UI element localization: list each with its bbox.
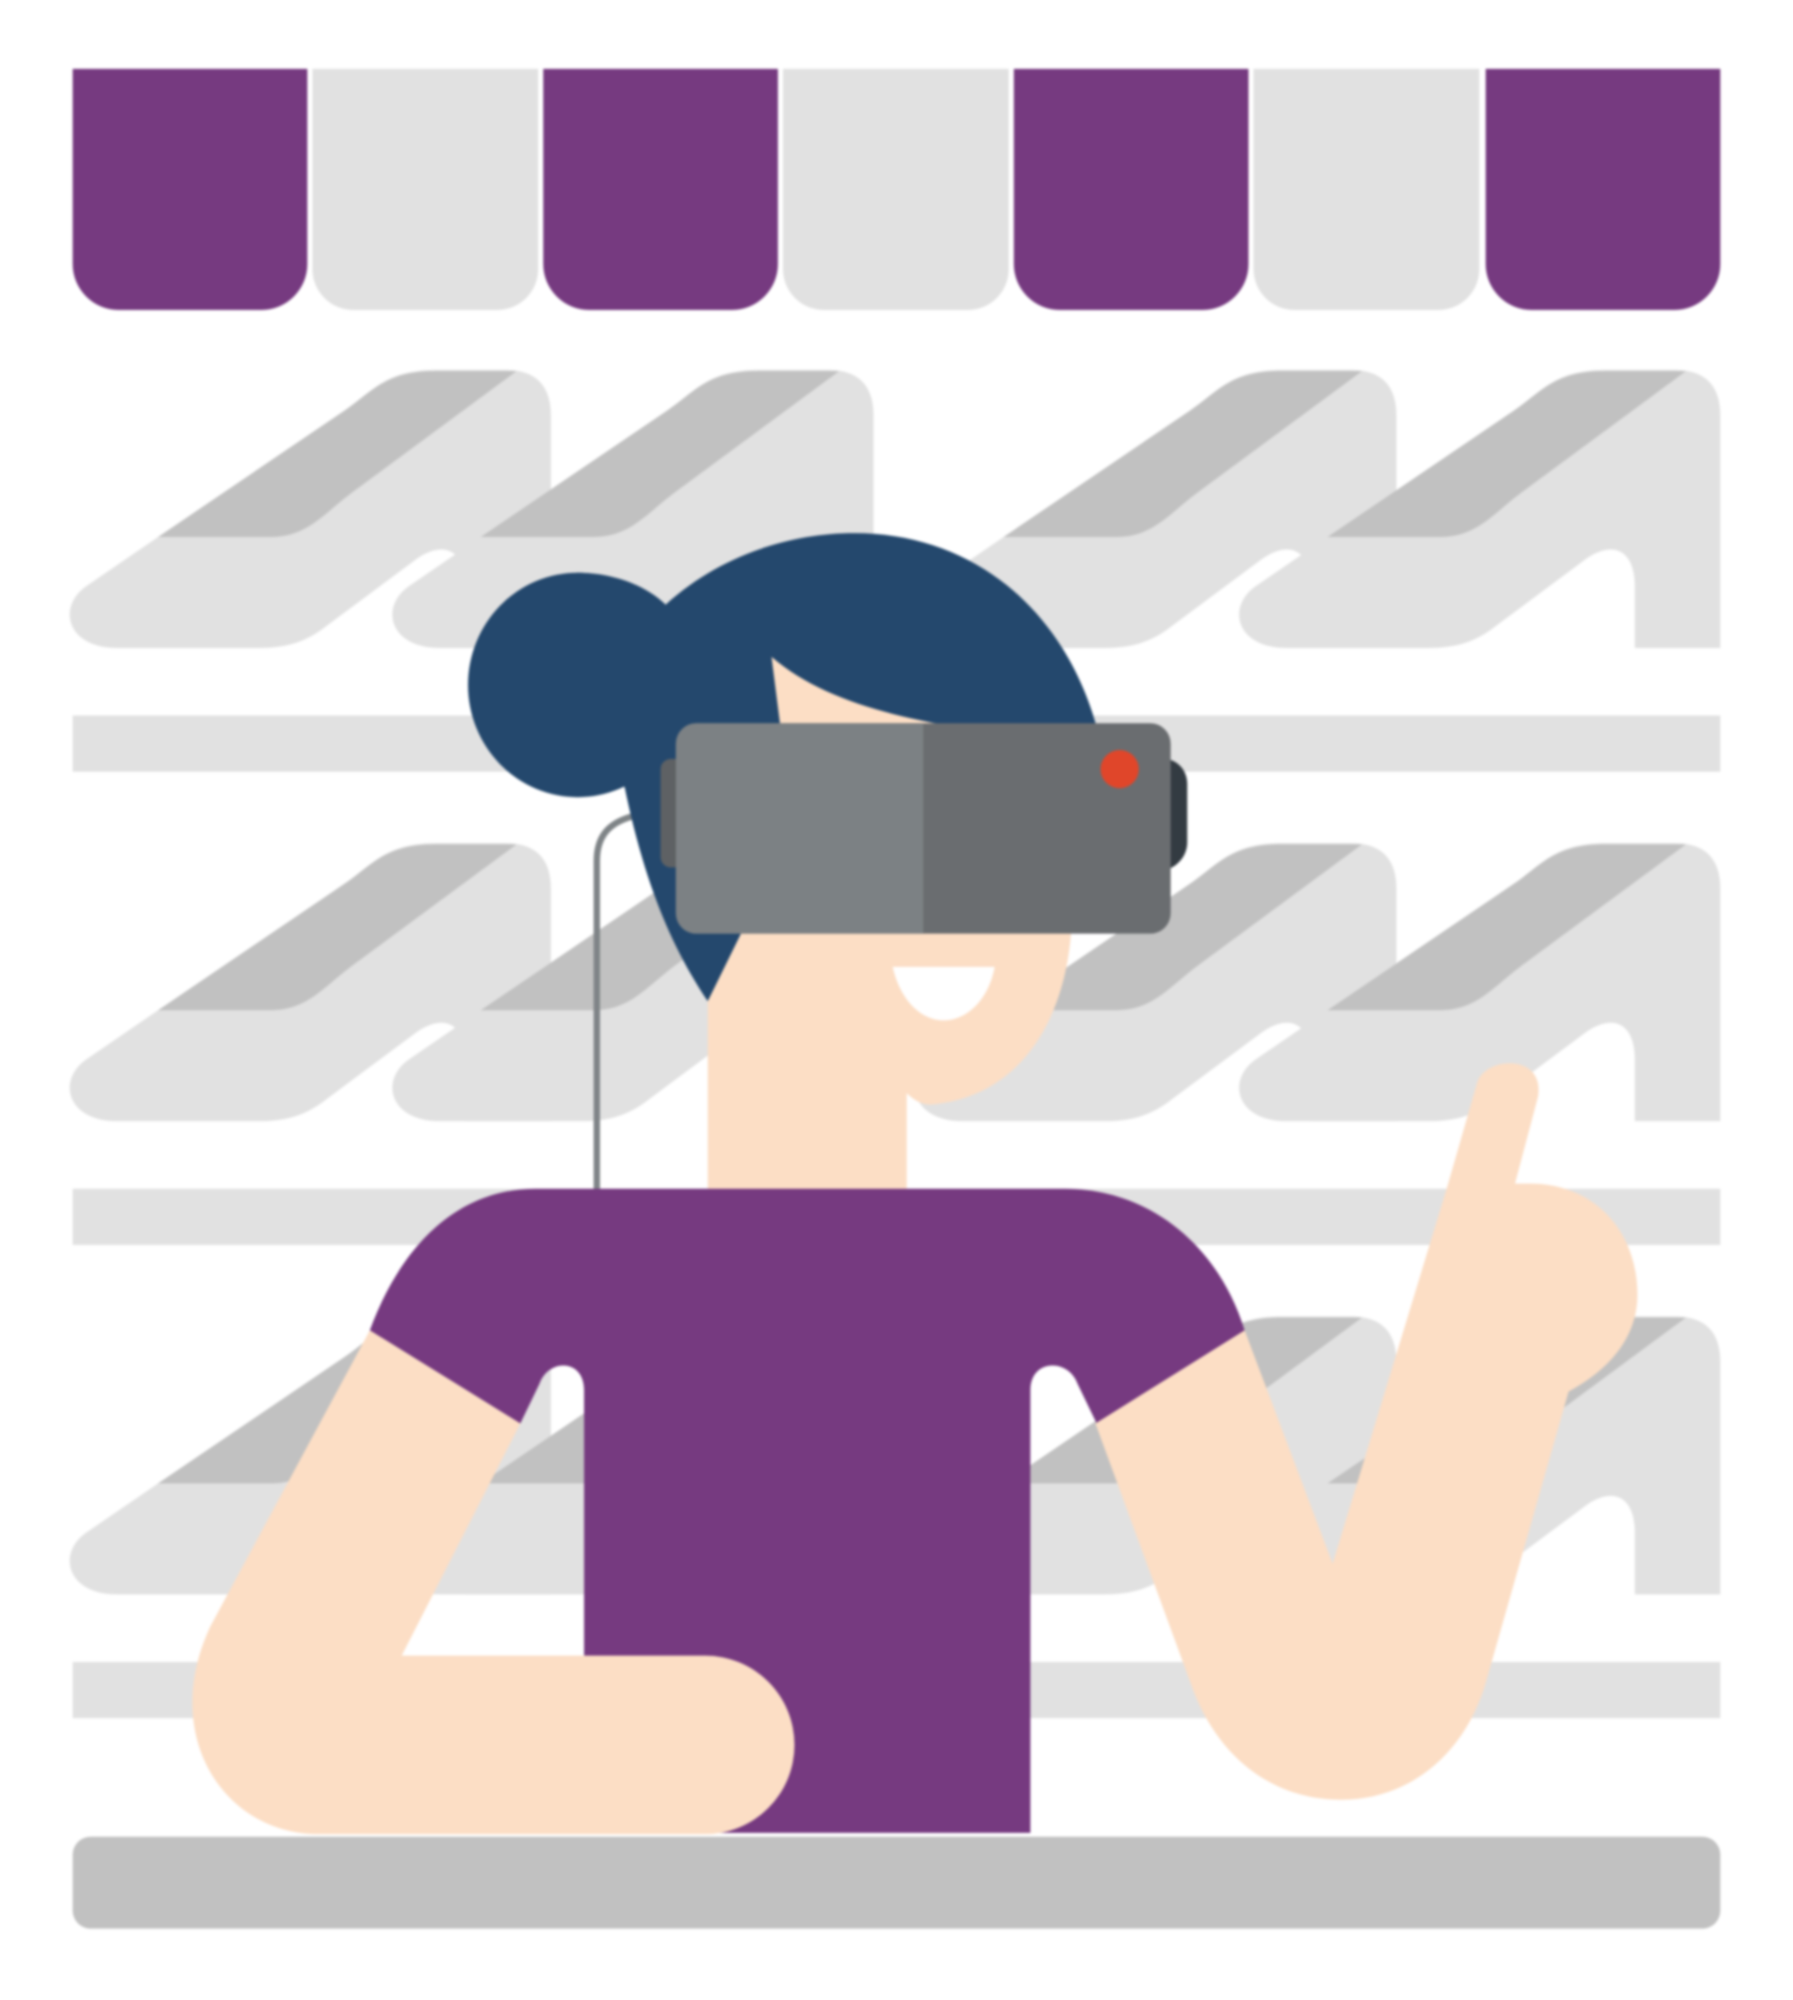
shoes row 2	[70, 843, 1720, 1121]
face and neck	[708, 931, 1071, 1191]
shoes row 1	[70, 370, 1720, 648]
t-shirt	[370, 1189, 1245, 1833]
left arm	[192, 1330, 794, 1834]
headset cable	[597, 816, 633, 1191]
hair	[468, 533, 1097, 1001]
mouth	[893, 967, 995, 1020]
forehead	[772, 657, 956, 727]
right arm with pointing hand	[1095, 1063, 1637, 1800]
VR headset	[661, 723, 1187, 934]
shoes row 3	[70, 1316, 1720, 1594]
shelf 2	[73, 1189, 1720, 1245]
shelf 1	[73, 716, 1720, 772]
awning	[73, 69, 1720, 310]
shelf 3	[73, 1662, 1720, 1718]
counter	[73, 1837, 1720, 1929]
